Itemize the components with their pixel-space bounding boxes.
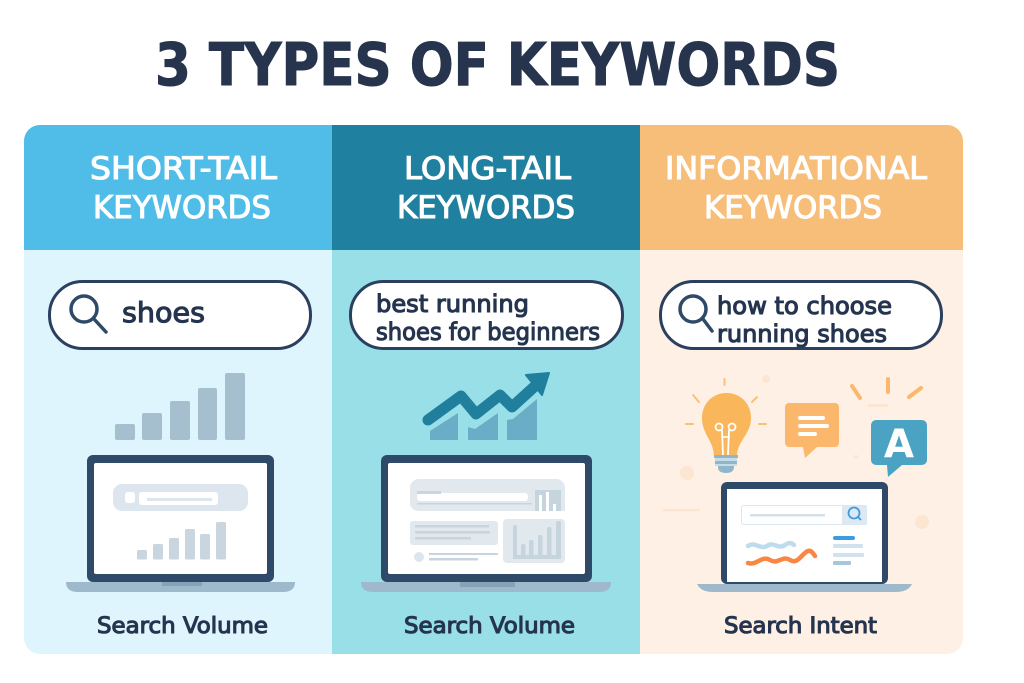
laptop with search screen [66,455,295,592]
icon: light bulb [686,379,766,473]
heading: informational keywords: INFORMATIONAL [665,151,927,187]
icon: rays [852,379,921,398]
panel: informational keywords [640,125,963,654]
search bar: shoes [50,282,310,348]
heading: long-tail keywords: KEYWORDS [397,190,575,226]
search bar: how to choose running shoes [660,282,942,348]
panel: long-tail keywords [332,125,640,654]
icon: blue letter A bubble: A [884,422,914,467]
heading: short-tail keywords: KEYWORDS [93,190,271,226]
bar chart: rising volume [115,373,245,440]
search bar: how to choose running shoes: running shoes [717,320,887,348]
panel: short-tail keywords [24,125,332,654]
search bar: best running shoes for beginners [350,282,622,348]
search bar: best running shoes for beginners: best running [376,290,529,318]
label: search volume: Search Volume [97,614,268,639]
heading: informational keywords [665,151,927,226]
heading: short-tail keywords: SHORT-TAIL [90,151,277,187]
laptop with search and trend screen [697,482,912,592]
title: 3 TYPES OF KEYWORDS [155,30,840,99]
heading: short-tail keywords [90,151,277,226]
icon: growth arrow over bars [428,373,549,440]
icon: orange speech bubble [785,403,839,458]
search bar: best running shoes for beginners: shoes for beginners [376,318,600,346]
heading: long-tail keywords [397,151,575,226]
label: search volume: Search Volume [404,614,575,639]
label: search intent: Search Intent [724,614,877,639]
heading: informational keywords: KEYWORDS [704,190,882,226]
laptop with results screen [361,455,611,592]
search bar: shoes: shoes [122,296,205,329]
decorative dots [662,375,929,529]
heading: long-tail keywords: LONG-TAIL [404,151,571,187]
search bar: how to choose running shoes: how to choose [717,292,892,320]
icon: blue letter A bubble [871,420,927,477]
